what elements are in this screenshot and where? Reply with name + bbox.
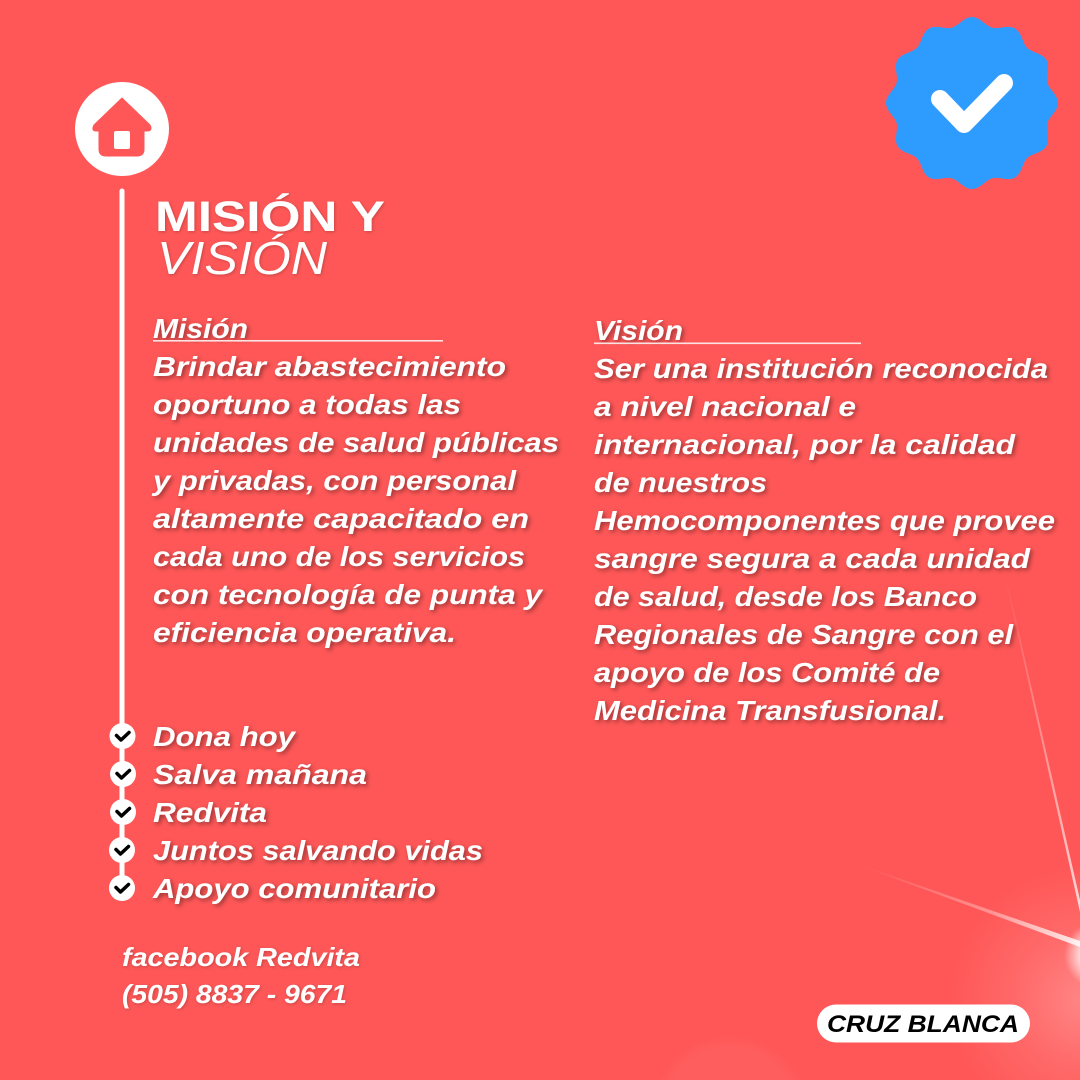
badge: cruz blanca: CRUZ BLANCA <box>827 1011 1019 1038</box>
lens flare <box>650 578 1080 1080</box>
check icons <box>109 723 136 901</box>
checklist text: Dona hoy <box>153 721 297 752</box>
checklist text: Redvita <box>153 797 267 828</box>
visión text: Ser una institución reconocida <box>594 353 1048 384</box>
visión text: de nuestros <box>594 467 767 498</box>
misión text: cada uno de los servicios <box>153 541 525 572</box>
misión underline <box>153 340 443 342</box>
visión text: Hemocomponentes que provee <box>594 505 1055 536</box>
icon: verified badge <box>886 17 1058 189</box>
contact text <box>122 942 360 1009</box>
misión text: Brindar abastecimiento <box>153 351 506 382</box>
misión text: con tecnología de punta y <box>153 579 544 610</box>
visión text: apoyo de los Comité de <box>594 657 940 688</box>
misión text: eficiencia operativa. <box>153 617 456 648</box>
title <box>155 192 385 284</box>
contact text: (505) 8837 - 9671 <box>122 979 347 1009</box>
misión heading: Misión <box>153 313 248 344</box>
visión text: Medicina Transfusional. <box>594 695 946 726</box>
visión text: internacional, por la calidad <box>594 429 1016 460</box>
timeline line <box>120 191 124 880</box>
visión underline <box>594 342 861 344</box>
visión text: Regionales de Sangre con el <box>594 619 1014 650</box>
checklist text: Apoyo comunitario <box>152 873 436 904</box>
misión text: altamente capacitado en <box>153 503 529 534</box>
visión text: de salud, desde los Banco <box>594 581 977 612</box>
visión heading: Visión <box>594 315 683 346</box>
icon: home <box>75 82 169 176</box>
contact text: facebook Redvita <box>122 942 360 972</box>
visión text: sangre segura a cada unidad <box>594 543 1031 574</box>
title: MISIÓN Y <box>155 192 385 241</box>
visión text: a nivel nacional e <box>594 391 856 422</box>
checklist text <box>152 721 483 904</box>
title: VISIÓN <box>157 232 328 284</box>
misión text: unidades de salud públicas <box>153 427 559 458</box>
badge: cruz blanca <box>817 1004 1030 1042</box>
visión text <box>594 353 1055 726</box>
checklist text: Salva mañana <box>153 759 367 790</box>
panel: visión <box>594 315 1055 726</box>
misión text <box>151 351 559 648</box>
misión text: oportuno a todas las <box>153 389 461 420</box>
panel: misión <box>151 313 559 648</box>
checklist text: Juntos salvando vidas <box>153 835 483 866</box>
misión text: y privadas, con personal <box>151 465 517 496</box>
